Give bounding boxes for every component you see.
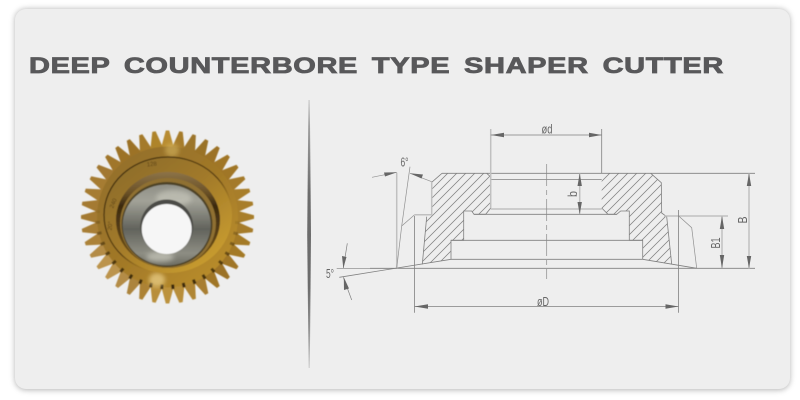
shadows between tooth roots <box>94 143 241 291</box>
gear body <box>97 146 238 288</box>
arrows: small diameter <box>491 133 602 137</box>
engraved markings: 20° <box>108 221 114 231</box>
center line <box>546 164 548 279</box>
label: b: b <box>566 191 580 197</box>
arrows: six degree <box>384 172 423 178</box>
arrows: height dimensions <box>578 173 751 268</box>
inner gold ring <box>120 178 216 268</box>
engraved markings: 128 <box>147 161 158 169</box>
steel highlights <box>156 190 192 206</box>
technical drawing <box>337 129 755 313</box>
gear face ring <box>104 157 232 273</box>
dimension: small diameter <box>491 129 602 173</box>
label: B1: B1 <box>709 237 723 248</box>
bore hole <box>142 204 192 254</box>
counterbore groove <box>116 172 220 268</box>
light thick lines <box>397 129 749 268</box>
label: large diameter: øD <box>537 295 549 309</box>
dimension: large diameter <box>414 210 678 313</box>
engraved markings <box>108 161 158 231</box>
steel disc <box>123 184 211 266</box>
dark seat ring <box>122 182 212 267</box>
arrows: large diameter <box>414 304 678 309</box>
cutter profile outlines <box>339 173 755 277</box>
dimension labels <box>326 122 750 309</box>
five degree angle <box>337 243 397 300</box>
label: five degree: 5° <box>326 267 334 281</box>
divider <box>307 100 311 368</box>
gear teeth <box>81 130 254 304</box>
bore rim <box>140 200 193 254</box>
label: B: B <box>736 216 750 224</box>
body highlights <box>165 143 179 157</box>
engraved markings: 240 <box>109 197 119 209</box>
hatched sections <box>423 174 670 262</box>
icon: gold shaper cutter photograph <box>81 130 254 304</box>
label: six degree: 6° <box>400 156 408 170</box>
label: small diameter: ød <box>542 122 553 136</box>
tooth profile lines <box>372 167 697 268</box>
title: DEEP COUNTERBORE TYPE SHAPER CUTTER <box>29 53 724 78</box>
